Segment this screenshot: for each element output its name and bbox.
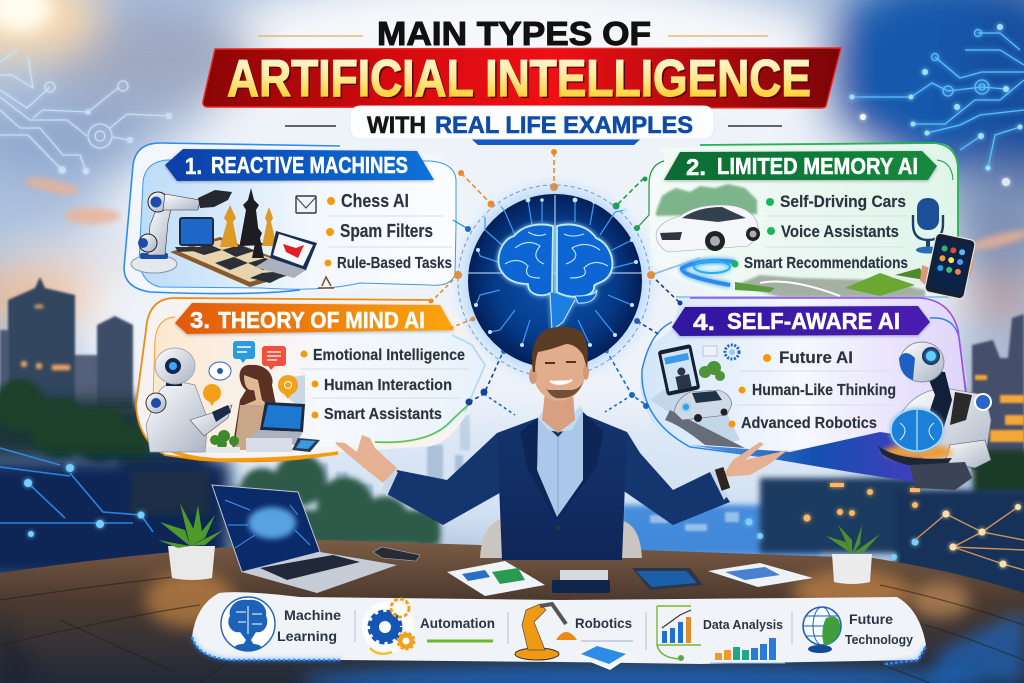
- blue data strip: [690, 432, 935, 482]
- mid trees: [222, 454, 441, 548]
- icon: brain: [498, 224, 612, 330]
- heading: limited memory: LIMITED MEMORY AI: [717, 153, 918, 179]
- panel: 2. limited memory AI: [637, 143, 976, 300]
- list: limited memory examples: Smart Recommendations: [744, 255, 908, 272]
- heading: reactive machines: [165, 149, 434, 181]
- illustration: tablet and smart car: [650, 344, 745, 448]
- laptop: [212, 485, 397, 593]
- list: limited memory examples: [732, 192, 908, 272]
- list: reactive machines examples: Spam Filters: [340, 221, 433, 241]
- sun glare: [0, 0, 52, 32]
- illustration: robot holding glowing brain: [878, 342, 991, 490]
- list: self-aware examples: [728, 348, 896, 432]
- connector lines: [431, 152, 700, 415]
- heading: theory of mind: THEORY OF MIND AI: [218, 307, 425, 333]
- presenter: [335, 326, 788, 560]
- table: [0, 540, 1024, 683]
- phone and tablet: [552, 568, 703, 593]
- title: main types of: MAIN TYPES OF: [377, 15, 651, 52]
- list: theory of mind examples: Human Interaction: [324, 377, 452, 394]
- list: reactive machines examples: Chess AI: [341, 191, 409, 211]
- heading: self-aware: 4.: [693, 309, 715, 335]
- item: future technology: [803, 607, 914, 653]
- distant centre skyline: [320, 415, 470, 509]
- list: reactive machines examples: [324, 191, 452, 272]
- left plant: [158, 503, 223, 580]
- title block: [203, 15, 841, 145]
- list: theory of mind examples: Smart Assistants: [324, 406, 442, 423]
- left buildings: [0, 277, 133, 415]
- report sheet: [708, 563, 813, 587]
- list: self-aware examples: Advanced Robotics: [741, 415, 877, 432]
- chair: [480, 518, 642, 558]
- item: robotics: [515, 604, 634, 670]
- panel: 4. self-aware AI: [640, 298, 991, 490]
- bottom toolbar: [192, 592, 926, 670]
- central brain circle and connectors: [428, 149, 700, 415]
- item: robotics: Robotics: [575, 615, 632, 631]
- heading: theory of mind: [175, 303, 454, 334]
- item: automation: Automation: [420, 615, 495, 631]
- panel: 1. reactive machines: [124, 143, 468, 294]
- list: theory of mind examples: [300, 347, 470, 423]
- list: self-aware examples: Human-Like Thinking: [752, 382, 896, 399]
- heading: limited memory: 2.: [686, 154, 706, 180]
- item: data analysis: Data Analysis: [703, 617, 783, 632]
- illustration: robot and woman conversing: [146, 341, 320, 453]
- desk items: [158, 485, 880, 596]
- title banner: artificial intelligence: ARTIFICIAL INTELLIGENCE: [227, 50, 811, 108]
- subtitle pill: with real life examples: REAL LIFE EXAMPLES: [435, 112, 693, 139]
- item: data analysis: [657, 606, 785, 663]
- report papers: [447, 561, 545, 596]
- illustration: robot arm and chess: [131, 188, 334, 288]
- item: future technology: Future: [849, 611, 893, 627]
- title banner: artificial intelligence: ARTIFICIAL INTELLIGENCE: [229, 52, 813, 110]
- right buildings: [620, 314, 1024, 620]
- circuit traces: [476, 200, 636, 345]
- wristwatch: [715, 467, 730, 491]
- item: machine learning: Learning: [277, 628, 337, 644]
- heading: reactive machines: REACTIVE MACHINES: [211, 152, 408, 178]
- head: [529, 326, 589, 433]
- heading: self-aware: [672, 306, 930, 336]
- hands: [335, 435, 788, 483]
- top-left circuit lines: [0, 50, 172, 174]
- heading: reactive machines: 1.: [185, 153, 202, 179]
- heading: self-aware: SELF-AWARE AI: [727, 308, 900, 334]
- item: machine learning: [221, 597, 341, 651]
- item: future technology: Technology: [845, 632, 914, 647]
- phone on desk: [373, 547, 420, 561]
- left trees and network: [0, 379, 441, 580]
- panel: 3. theory of mind AI: [136, 298, 485, 461]
- item: machine learning: Machine: [284, 607, 341, 623]
- item: automation: [362, 599, 495, 654]
- top-right circuit lines: [850, 24, 1024, 186]
- list: self-aware examples: Future AI: [779, 348, 853, 367]
- subtitle pill: with real life examples: WITH: [367, 112, 426, 139]
- jacket and shirt: [382, 406, 730, 560]
- list: limited memory examples: Voice Assistants: [781, 222, 899, 241]
- peach cloud streaks: [23, 174, 1024, 253]
- illustration: self-driving car, mic and phone: [656, 184, 976, 300]
- list: theory of mind examples: Emotional Intelligence: [313, 347, 465, 364]
- right plant: [826, 525, 880, 584]
- subtitle pill: with real life examples: [350, 106, 714, 145]
- list: reactive machines examples: Rule-Based Tasks: [337, 255, 452, 272]
- heading: theory of mind: 3.: [190, 307, 210, 333]
- list: limited memory examples: Self-Driving Cars: [780, 192, 906, 211]
